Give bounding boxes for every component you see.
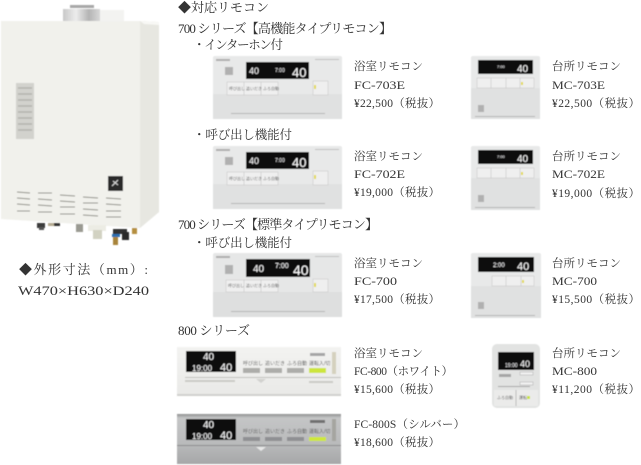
text: FC-800S: ¥18,600（税抜） [354,435,440,449]
remote: FC-800 white: 運転入/切 [309,360,330,367]
text: MC-703E: ¥22,500（税抜） [552,96,640,110]
remote: MC-703E [471,56,540,119]
remote: FC-703E: 呼び出し [229,85,245,91]
remote: FC-800S silver: 運転入/切 [309,428,330,435]
remote: MC-800: 運転 [519,394,527,400]
remote: FC-800 white: 40 [203,352,215,363]
text: MC-800: ¥11,200（税抜） [552,382,640,396]
text: FC-800: 浴室リモコン [354,346,423,360]
remote: FC-702E: 呼び出し [229,175,245,181]
subheading: call function: ・呼び出し機能付 [193,127,292,142]
text: MC-800: 台所リモコン [552,346,621,360]
heading: compatible remotes: ◆対応リモコン [178,0,269,15]
water heater unit [1,5,159,245]
text: FC-700: ¥17,500（税抜） [354,292,440,306]
remote: FC-702E: 40 [249,156,259,166]
remote: FC-702E [213,146,342,209]
text: MC-702E [552,149,640,200]
remote: MC-703E: 40 [517,64,529,75]
text: FC-702E: ¥19,000（税抜） [354,185,440,199]
text: MC-700: ¥15,500（税抜） [552,292,640,306]
text: FC-700 [354,256,440,306]
text: FC-800: FC-800（ホワイト） [354,365,453,378]
text: FC-703E: FC-703E [354,80,405,92]
remote: FC-800S silver: 19:00 [192,432,213,441]
remote: MC-700: 40 [517,261,529,273]
remote: FC-700: 40 [293,262,309,278]
remote: FC-800 white: ふろ自動 [287,360,307,367]
remote: FC-700: 40 [253,264,265,275]
remote: MC-703E: 7:00 [497,64,506,69]
remote: FC-702E: 40 [292,155,306,170]
text: MC-800 [552,346,640,396]
text: MC-703E: 台所リモコン [552,59,621,73]
remote: FC-800S silver: 40 [203,420,215,431]
remote: MC-800: 19:00 [505,363,518,369]
remote: FC-700: 追いだき [246,282,262,288]
heading: 700 series standard: 700 シリーズ【標準タイプリモコン】 [178,217,378,232]
text: FC-800S: FC-800S（シルバー） [354,418,465,431]
subheading: intercom: ・インターホン付 [193,37,283,52]
remote: FC-703E: 7:00 [275,68,285,74]
dimensions caption [18,262,149,298]
dimensions caption: W470×H630×D240 [18,284,149,298]
text: FC-702E [354,149,440,199]
text: FC-702E: 浴室リモコン [354,149,423,163]
remote: FC-800 white: 追いだき [265,360,285,367]
text: MC-700: 台所リモコン [552,256,621,270]
remote: MC-700 [471,253,541,318]
remote: FC-800S silver: 呼び出し [243,428,263,435]
text: MC-703E [552,59,640,110]
remote: FC-703E: ふろ自動 [263,85,279,91]
remote: MC-702E [471,146,540,210]
remote: FC-800 white: 呼び出し [243,360,263,367]
remote: MC-702E: 40 [517,154,529,165]
text: FC-703E: ¥22,500（税抜） [354,96,440,110]
remote: FC-702E: 7:00 [275,158,285,164]
remote: FC-703E: 40 [249,66,259,76]
text: MC-700: MC-700 [552,276,597,288]
text: FC-700: FC-700 [354,276,397,288]
heading: 800 series: 800 シリーズ [178,323,250,338]
remote: FC-800 white [177,347,341,396]
remote: FC-703E: 40 [292,65,306,80]
remote: MC-700: 2:00 [493,263,505,269]
text: MC-702E: ¥19,000（税抜） [552,186,640,200]
text: FC-800: ¥15,600（税抜） [354,382,440,396]
dimensions caption: ◆外形寸法（mm）: [19,262,148,277]
text: FC-703E: 浴室リモコン [354,59,423,73]
text: FC-800 [354,346,453,396]
text: MC-800: MC-800 [552,366,597,378]
text: MC-702E: 台所リモコン [552,149,621,163]
remote: MC-702E: 7:00 [497,154,506,159]
remote: MC-800: 40 [520,359,530,369]
remote: FC-700 [213,253,342,317]
remote: FC-800S silver: 追いだき [265,428,285,435]
text: MC-703E: MC-703E [552,80,605,92]
remote: MC-800 [492,344,540,408]
text: FC-700: 浴室リモコン [354,256,423,270]
text: FC-703E [354,59,440,110]
remote: MC-800: ふろ自動 [497,394,513,400]
remote: FC-800 white: 40 [220,362,232,374]
heading: 700 series high function: 700 シリーズ【高機能タイプリモコン】 [178,21,392,36]
remote: FC-700: 7:00 [275,263,289,270]
text: MC-700 [552,256,640,306]
remote: FC-702E: 追いだき [246,175,262,181]
remote: FC-800 white: 19:00 [192,364,213,373]
remote: FC-702E: ふろ自動 [263,175,279,181]
text: FC-800S [354,418,465,449]
remote: FC-703E: 追いだき [246,85,262,91]
remote: FC-800S silver: 40 [220,430,232,442]
remote: FC-700: ふろ自動 [263,282,279,288]
subheading: call function: ・呼び出し機能付 [193,235,292,250]
remote: FC-800S silver: ふろ自動 [287,428,307,435]
remote: FC-703E [213,56,342,119]
text: FC-702E: FC-702E [354,169,405,181]
remote: FC-800S silver [177,414,341,464]
remote: FC-700: 呼び出し [228,282,244,288]
text: MC-702E: MC-702E [552,169,605,181]
